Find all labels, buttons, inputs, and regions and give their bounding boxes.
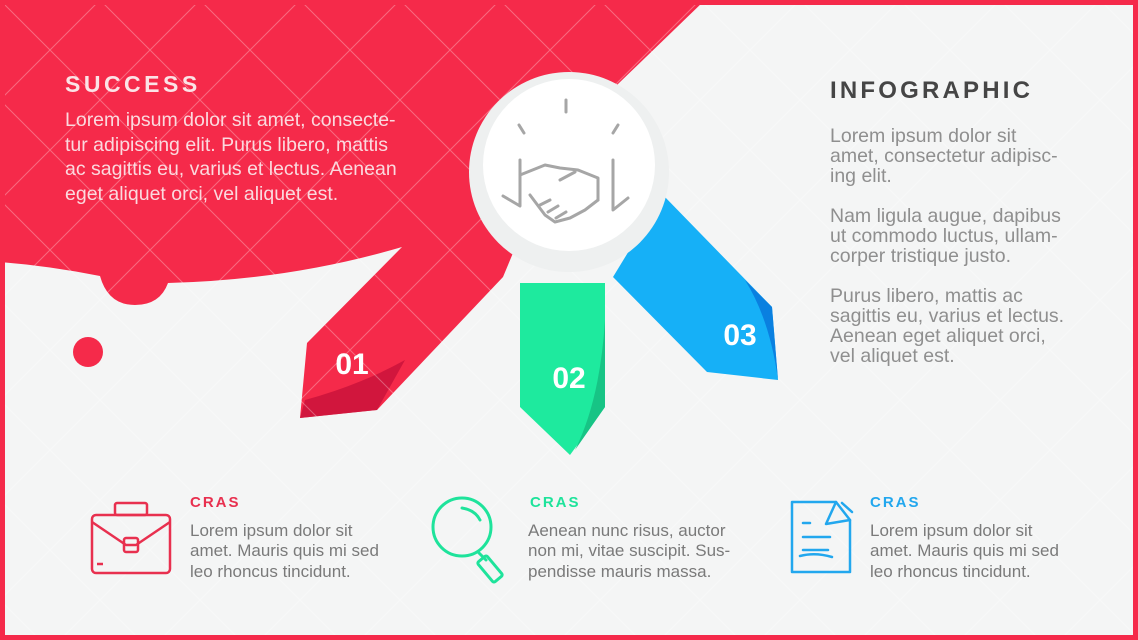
column 3 text [870,494,1059,581]
icon: briefcase [92,503,170,573]
icon: document [792,502,852,572]
text block: infographic body: Purus libero, mattis ac [830,285,1023,307]
text block: success body: eget aliquet orci, vel aliquet est. [65,183,338,205]
icon: magnifier [433,498,503,583]
text block: infographic body: Lorem ipsum dolor sit [830,125,1017,147]
column 1 text: Lorem ipsum dolor sit [190,521,353,540]
text block: infographic body: Aenean eget aliquet orci, [830,325,1046,347]
red dot [73,337,103,367]
column 3 text: Lorem ipsum dolor sit [870,521,1033,540]
column 3 text: leo rhoncus tincidunt. [870,562,1031,581]
column 1 text: amet. Mauris quis mi sed [190,541,379,560]
text block: infographic body: corper tristique justo. [830,245,1011,267]
column 1 text: leo rhoncus tincidunt. [190,562,351,581]
column 3 text: CRAS [870,494,921,511]
text block: success body: tur adipiscing elit. Purus libero, mattis [65,134,388,156]
number 03: 03 [723,319,757,352]
text block: infographic body: Nam ligula augue, dapibus [830,205,1061,227]
column 2 text [528,494,730,581]
heading: success: SUCCESS [65,71,201,97]
red background shape [0,0,705,418]
text block: infographic body: ing elit. [830,165,892,187]
text block: infographic body: ut commodo luctus, ullam- [830,225,1058,247]
text block: infographic body: vel aliquet est. [830,345,955,367]
ribbon 02 green [520,283,605,455]
column 2 text: pendisse mauris massa. [528,562,711,581]
text block: success body: ac sagittis eu, varius et lectus. Aenean [65,158,397,180]
center circle with handshake icon [469,72,669,272]
text block: infographic body: sagittis eu, varius et lectus. [830,305,1064,327]
text block: success body: Lorem ipsum dolor sit amet, consecte- [65,109,396,131]
text block: infographic body: amet, consectetur adipisc- [830,145,1058,167]
number 02: 02 [552,362,586,395]
column 2 text: Aenean nunc risus, auctor [528,521,726,540]
column 2 text: CRAS [530,494,581,511]
column 2 text: non mi, vitae suscipit. Sus- [528,541,730,560]
number 01: 01 [335,348,369,381]
column 1 text: CRAS [190,494,241,511]
column 1 text [190,494,379,581]
column 3 text: amet. Mauris quis mi sed [870,541,1059,560]
ribbon 03 blue [613,195,778,380]
heading: infographic: INFOGRAPHIC [830,77,1033,104]
